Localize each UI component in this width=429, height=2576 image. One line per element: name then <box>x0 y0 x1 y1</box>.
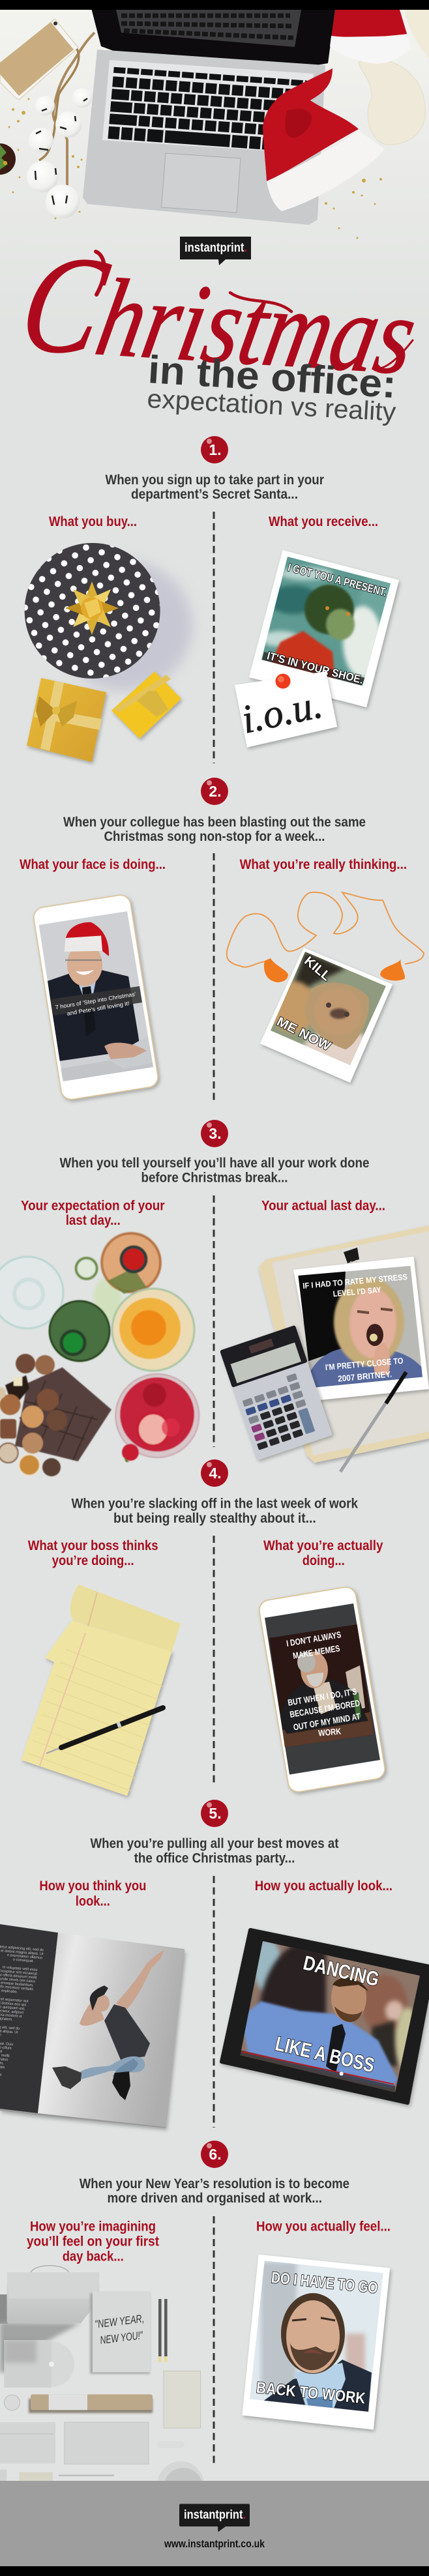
heading 1: department’s Secret Santa... <box>131 487 298 502</box>
icon: gold bow <box>65 581 119 635</box>
badge 3 <box>201 1120 228 1147</box>
badge 1 <box>201 436 228 463</box>
notebook: new year new you <box>90 2291 151 2374</box>
phone: Dos Equis meme <box>258 1586 387 1793</box>
label: your expectation of your last day: last day... <box>66 1213 121 1228</box>
label: how you're imagining: you’ll feel on your first <box>27 2234 159 2249</box>
polaroid: back to work meme <box>242 2255 390 2429</box>
icon: folder and paper <box>259 1225 429 1463</box>
eraser <box>157 2441 185 2448</box>
section 6 <box>0 2141 391 2508</box>
brochure body copy: in voluptate velit esse <box>3 1965 38 1972</box>
icon: chocolates <box>0 1354 111 1476</box>
CD case <box>4 2340 74 2388</box>
small notepad <box>164 2371 201 2428</box>
heading 4: but being really stealthy about it... <box>113 1511 316 1526</box>
heading 2: Christmas song non-stop for a week... <box>104 829 325 844</box>
note: i.o.u. with pin: i.o.u. <box>238 682 326 742</box>
label: how you think you look: How you think you <box>39 1879 146 1894</box>
website url: www.instantprint.co.uk <box>164 2538 265 2550</box>
label: your expectation of your last day <box>21 1198 165 1228</box>
tablet: dancing like a boss meme: DANCING <box>301 1951 381 1991</box>
caption bar: and Pete's still loving it! <box>67 1000 130 1017</box>
icon: black pen <box>46 1708 163 1753</box>
stationery flat lay <box>0 2265 203 2481</box>
section 5 <box>0 1800 429 2128</box>
title swashes <box>96 252 413 369</box>
polaroid: stressed woman meme: I'M PRETTY CLOSE TO <box>325 1356 404 1372</box>
polaroid: grinch meme: IT'S IN YOUR SHOE. <box>265 649 364 686</box>
badge 6: 6. <box>209 2146 222 2163</box>
badge 5 <box>201 1800 228 1827</box>
polaroid: back to work meme: BACK TO WORK <box>256 2379 366 2408</box>
heading 3: before Christmas break... <box>141 1171 288 1185</box>
polaroid: grinch meme <box>248 548 404 707</box>
shopping bag <box>7 2266 100 2323</box>
heading 1 <box>106 473 324 502</box>
icon: gold gift box <box>27 678 106 762</box>
badge 1: 1. <box>209 441 222 458</box>
brochure body copy: o consequat. <box>13 1958 35 1963</box>
polaroid: cat in bread meme: ME NOW <box>274 1014 333 1054</box>
phone: Dos Equis meme: OUT OF MY MIND AT <box>293 1711 361 1733</box>
label: how you think you look <box>39 1879 146 1909</box>
caption bar <box>51 986 142 1017</box>
icon: orange ear plugs <box>227 892 424 982</box>
icon: small yellow gift box <box>111 671 181 739</box>
badge 4 <box>201 1459 228 1487</box>
section 4 <box>22 1459 387 1796</box>
polaroid: stressed woman meme: 2007 BRITNEY. <box>338 1369 392 1384</box>
label: how you actually feel: How you actually feel... <box>256 2219 391 2234</box>
phone: smiling man in Santa hat <box>33 894 159 1101</box>
caption bar: 7 hours of 'Step into Christmas' <box>55 991 136 1010</box>
heading 2 <box>63 815 366 844</box>
section 2 <box>20 778 424 1104</box>
heading 5 <box>90 1836 339 1866</box>
subtitle: expectation vs reality: expectation vs reality <box>147 385 396 427</box>
label: what you're actually doing: doing... <box>303 1553 345 1568</box>
header photo: desk with laptop and Santa hats <box>0 10 429 323</box>
phone: Dos Equis meme: MAKE MEMES <box>292 1643 340 1661</box>
label: what your boss thinks you're doing <box>28 1538 158 1568</box>
icon: binder clip <box>344 1248 362 1285</box>
polaroid: cat in bread meme <box>260 945 392 1083</box>
label: how you're imagining: day back... <box>63 2249 124 2264</box>
polaroid: stressed woman meme <box>293 1257 429 1400</box>
phone: Dos Equis meme: WORK <box>318 1727 342 1738</box>
label: what you're actually doing <box>263 1538 383 1568</box>
icon: Santa hat on keyboard <box>263 68 385 211</box>
pencils <box>158 2299 168 2362</box>
badge 2 <box>201 778 228 805</box>
title: in the office: in the office: <box>147 347 398 406</box>
heading 3 <box>60 1156 369 1185</box>
cup and bottom items <box>0 2461 203 2481</box>
section 3 <box>0 1120 429 1476</box>
icon: Santa hat on man <box>65 922 109 956</box>
polaroid: stressed woman meme: IF I HAD TO RATE MY STRESS <box>303 1272 407 1291</box>
label: your expectation of your last day: Your expectation of your <box>21 1198 165 1214</box>
logo: instantprint footer: instantprint. <box>184 2508 246 2522</box>
heading 5: When you’re pulling all your best moves at <box>90 1836 339 1851</box>
heading 4 <box>72 1497 358 1526</box>
note: i.o.u. with pin <box>235 671 337 747</box>
icon: bowl at left edge <box>0 143 16 175</box>
heading 4: When you’re slacking off in the last week of work <box>72 1497 358 1511</box>
label: what you're actually doing: What you’re actually <box>263 1538 383 1553</box>
label: what you're really thinking: What you’re really thinking... <box>240 857 407 872</box>
logo: instantprint header: instantprint. <box>185 241 247 255</box>
top black band <box>0 0 429 10</box>
heading 3: When you tell yourself you’ll have all your work done <box>60 1156 369 1171</box>
notebook: new year new you: "NEW YEAR, <box>94 2312 145 2331</box>
label: what you buy: What you buy... <box>49 514 137 529</box>
phone: Dos Equis meme: I DON'T ALWAYS <box>286 1630 342 1648</box>
polaroid: grinch meme: I GOT YOU A PRESENT. <box>286 561 388 598</box>
heading 2: When your collegue has been blasting out the same <box>63 815 366 830</box>
heading 6 <box>80 2176 349 2206</box>
brochure: dancer <box>0 1924 185 2128</box>
heading 1: When you sign up to take part in your <box>106 473 324 488</box>
polaroid: cat in bread meme: KILL <box>301 954 334 984</box>
envelopes <box>0 2422 149 2464</box>
logo: instantprint header <box>180 237 251 265</box>
badge 4: 4. <box>209 1465 222 1482</box>
bottom black band <box>0 2566 429 2576</box>
brochure body copy: emoque laudantium, <box>1 1981 34 1987</box>
icon: beige fur glove <box>359 10 429 145</box>
label: your actual last day: Your actual last day... <box>261 1198 385 1214</box>
label: what your boss thinks you're doing: you’re doing... <box>52 1553 134 1568</box>
notebook: new year new you: NEW YOU!" <box>99 2329 144 2347</box>
polaroid: back to work meme: DO I HAVE TO GO <box>271 2269 379 2297</box>
badge 2: 2. <box>209 783 222 800</box>
label: what your face is doing: What your face is doing... <box>20 857 166 872</box>
dancer figure <box>52 1950 164 2100</box>
label: what your boss thinks you're doing: What your boss thinks <box>28 1538 158 1553</box>
badge 6 <box>201 2141 228 2168</box>
icon: drinks from above <box>0 1233 199 1462</box>
footer band <box>0 2481 429 2566</box>
icon: Santa hat top right <box>330 10 411 64</box>
label: how you actually look: How you actually look... <box>255 1879 392 1894</box>
heading 5: the office Christmas party... <box>134 1851 295 1866</box>
label: how you're imagining: How you’re imagining <box>30 2219 156 2234</box>
cardboard tube <box>4 2394 153 2413</box>
icon: round polka dot gift box <box>25 543 192 691</box>
brochure body copy: ri exercitation ullamco <box>7 1954 42 1960</box>
icon: yellow legal notepad <box>22 1585 181 1796</box>
logo: instantprint footer <box>179 2504 250 2532</box>
icon: rope and jingle bells <box>27 33 95 218</box>
heading 6: When your New Year’s resolution is to become <box>80 2176 349 2191</box>
label: how you think you look: look... <box>76 1894 110 1909</box>
section 1 <box>25 436 404 763</box>
phone: Dos Equis meme: BUT WHEN I DO, IT'S <box>287 1686 357 1708</box>
label: how you're imagining <box>27 2219 159 2264</box>
badge 5: 5. <box>209 1805 222 1822</box>
label: what you receive: What you receive... <box>269 514 378 529</box>
tablet: dancing like a boss meme <box>222 1930 429 2103</box>
phone: Dos Equis meme: BECAUSE I'M BORED <box>289 1698 361 1720</box>
heading 6: more driven and organised at work... <box>107 2191 322 2206</box>
tablet: dancing like a boss meme: LIKE A BOSS <box>273 2032 377 2077</box>
polaroid: stressed woman meme: LEVEL I'D SAY <box>333 1285 382 1298</box>
icon: ballpoint pen <box>340 1372 406 1472</box>
icon: laptop <box>83 10 335 225</box>
badge 3: 3. <box>209 1125 222 1142</box>
icon: calculator <box>220 1325 333 1461</box>
icon: gold glitter sprinkles <box>8 98 382 239</box>
icon: gold phone <box>0 19 78 100</box>
